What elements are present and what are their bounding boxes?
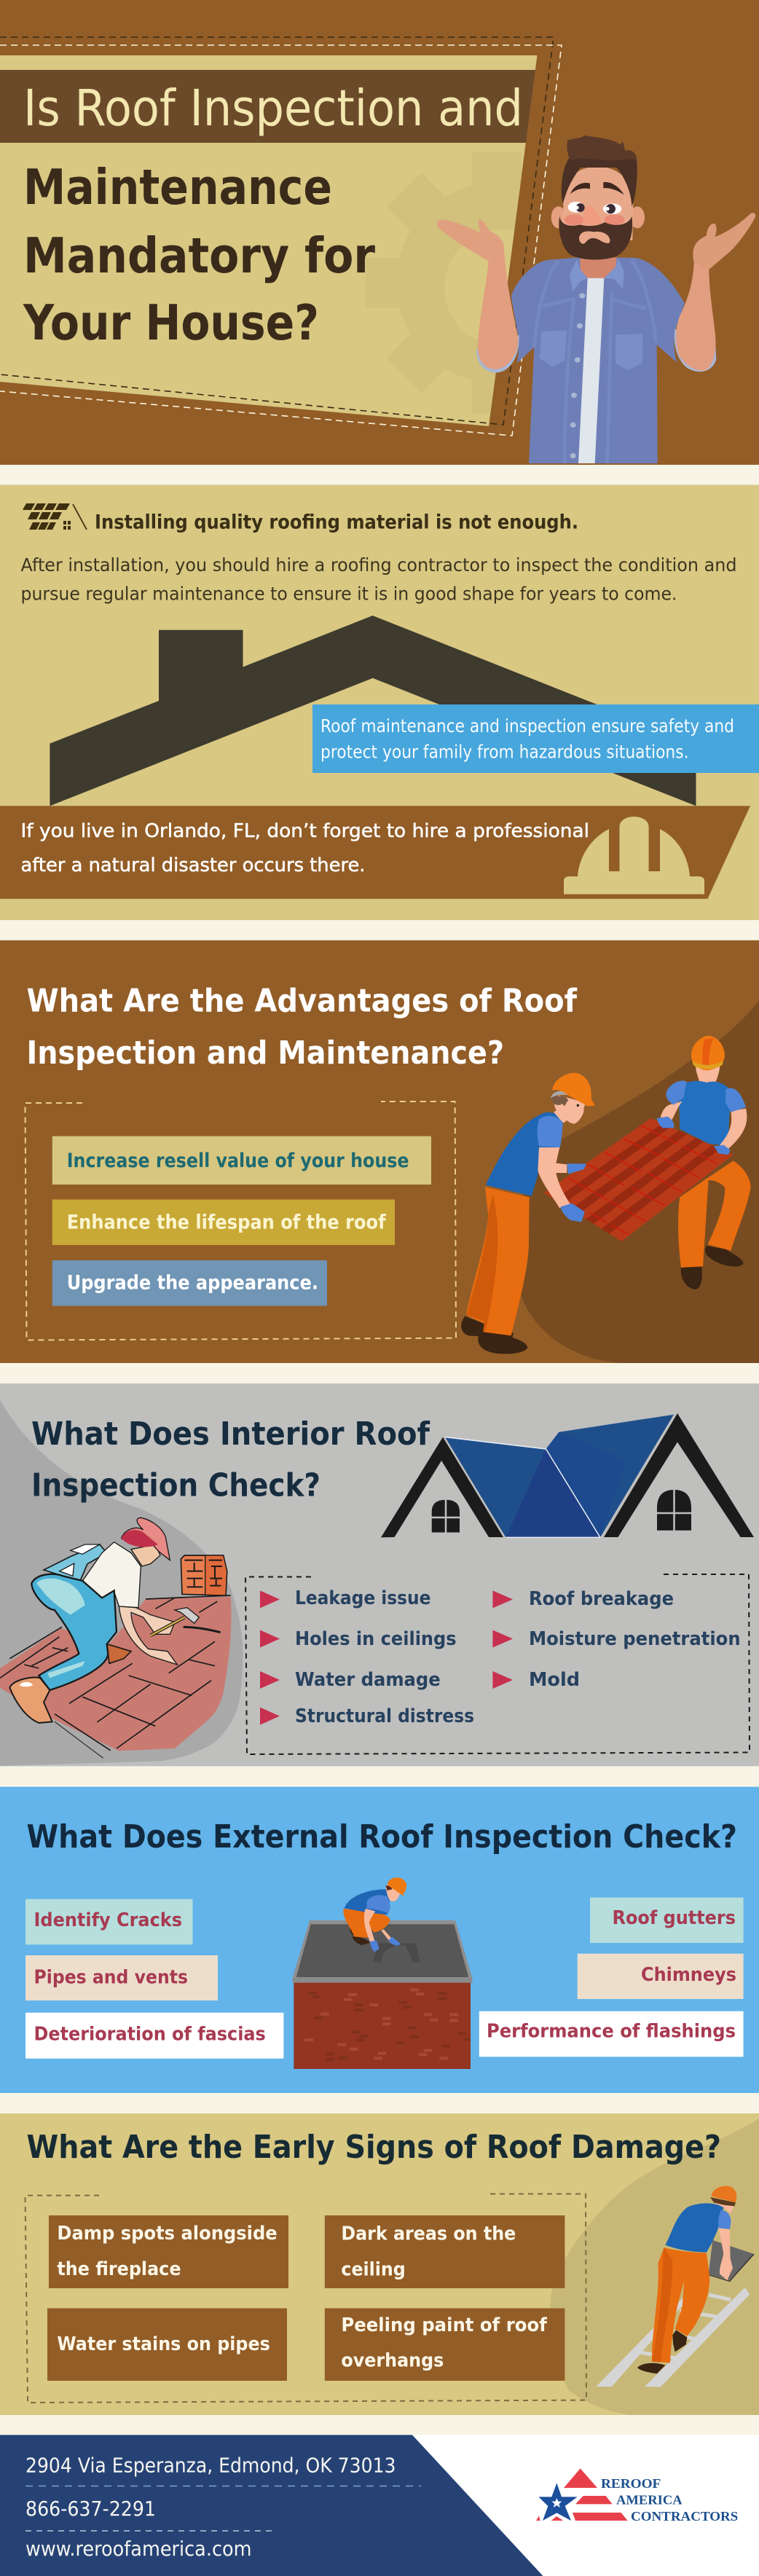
checklist: right column xyxy=(492,1588,741,1691)
bullet arrows left xyxy=(260,1590,280,1725)
checklist: right column: Moisture penetration xyxy=(529,1628,741,1650)
title: Maintenance xyxy=(23,159,332,216)
checklist: left column xyxy=(260,1587,474,1727)
sign: dark areas: Dark areas on the xyxy=(341,2223,516,2245)
bullet arrows right xyxy=(492,1590,513,1689)
intro paragraph: After installation, you should hire a roofing contractor to inspect the condition and xyxy=(20,554,737,576)
checklist: right column: Roof breakage xyxy=(529,1588,674,1610)
icon: hard hat xyxy=(564,817,704,895)
callout: safety xyxy=(312,704,759,773)
sign: water stains: Water stains on pipes xyxy=(57,2333,270,2355)
label: roof gutters xyxy=(590,1898,744,1943)
logo: REROOF xyxy=(601,2476,661,2491)
sign: peeling paint: Peeling paint of roof xyxy=(341,2314,547,2336)
heading: What Does Interior Roof xyxy=(31,1416,430,1453)
label: flashings xyxy=(479,2011,744,2057)
title xyxy=(23,79,523,351)
panel: installing quality roofing xyxy=(0,485,759,920)
contact phone: 866-637-2291 xyxy=(25,2497,156,2521)
list item: resell value xyxy=(52,1136,431,1185)
illustration: two workers carrying roof tiles xyxy=(461,1036,751,1354)
label: flashings: Performance of flashings xyxy=(487,2021,736,2043)
logo xyxy=(536,2468,739,2524)
icon: roof tiles xyxy=(23,503,87,530)
illustration: house roof silhouette xyxy=(50,616,696,806)
label: chimneys xyxy=(578,1954,744,1999)
backdrop hill xyxy=(550,2118,759,2415)
footer xyxy=(0,2435,759,2576)
callout: safety: protect your family from hazardous situations. xyxy=(320,742,689,763)
sign: damp spots: the fireplace xyxy=(57,2258,181,2280)
illustration: worker climbing ladder xyxy=(596,2186,754,2387)
sign: dark areas xyxy=(325,2215,565,2288)
title: Your House? xyxy=(23,294,319,351)
hero title card xyxy=(0,55,538,426)
backdrop shape xyxy=(0,1400,243,1766)
label: chimneys: Chimneys xyxy=(641,1964,736,1986)
label: fascias xyxy=(25,2013,283,2059)
label: pipes and vents xyxy=(25,1955,218,2000)
label: roof gutters: Roof gutters xyxy=(612,1907,736,1929)
intro paragraph xyxy=(20,554,737,605)
label: fascias: Deterioration of fascias xyxy=(34,2024,266,2046)
heading xyxy=(26,983,578,1072)
illustration: worker on flat roof building xyxy=(293,1877,472,2069)
logo: AMERICA xyxy=(616,2493,683,2508)
sign: damp spots: Damp spots alongside xyxy=(57,2223,278,2245)
panel: interior inspection xyxy=(0,1383,759,1766)
label: pipes and vents: Pipes and vents xyxy=(34,1967,188,1989)
sign: peeling paint xyxy=(325,2308,565,2381)
intro paragraph: pursue regular maintenance to ensure it is in good shape for years to come. xyxy=(20,583,677,605)
backdrop hill xyxy=(519,1000,759,1363)
contact website: www.reroofamerica.com xyxy=(25,2537,252,2561)
title: Is Roof Inspection and xyxy=(23,79,523,138)
banner: Orlando: after a natural disaster occurs there. xyxy=(20,855,366,876)
illustration: roofer hammering xyxy=(0,1517,232,1758)
list item: resell value: Increase resell value of your house xyxy=(67,1150,409,1172)
panel: external inspection xyxy=(0,1787,759,2093)
illustration: house with blue roof xyxy=(381,1413,754,1537)
label: identify cracks: Identify Cracks xyxy=(34,1909,182,1931)
panel: hero xyxy=(0,0,759,465)
heading: Inspection and Maintenance? xyxy=(26,1035,504,1072)
icon: gear watermark xyxy=(490,176,522,414)
illustration: shrugging man xyxy=(437,136,755,463)
label: identify cracks xyxy=(25,1899,192,1944)
banner: Orlando xyxy=(0,806,750,899)
contact address: 2904 Via Esperanza, Edmond, OK 73013 xyxy=(25,2454,396,2477)
heading: What Are the Advantages of Roof xyxy=(26,983,578,1020)
list item: lifespan xyxy=(52,1199,395,1245)
title: Mandatory for xyxy=(23,227,375,284)
checklist: left column: Water damage xyxy=(295,1669,441,1691)
sign: peeling paint: overhangs xyxy=(341,2350,444,2372)
panel: advantages xyxy=(0,941,759,1363)
heading: Inspection Check? xyxy=(31,1468,320,1504)
banner: Orlando: If you live in Orlando, FL, don’t forget to hire a professional xyxy=(20,820,589,842)
list item: lifespan: Enhance the lifespan of the roof xyxy=(67,1211,386,1234)
sign: damp spots xyxy=(49,2215,288,2288)
list item: appearance: Upgrade the appearance. xyxy=(67,1272,318,1294)
heading xyxy=(31,1416,430,1504)
checklist: right column: Mold xyxy=(529,1669,580,1691)
panel: early signs xyxy=(0,2113,759,2415)
logo: CONTRACTORS xyxy=(631,2509,739,2524)
checklist: left column: Holes in ceilings xyxy=(295,1628,457,1650)
sign: water stains xyxy=(47,2308,287,2381)
checklist: left column: Structural distress xyxy=(295,1705,474,1727)
sign: dark areas: ceiling xyxy=(341,2258,406,2280)
list item: appearance xyxy=(52,1260,327,1305)
heading: Installing quality roofing material is not enough. xyxy=(95,511,578,533)
checklist: left column: Leakage issue xyxy=(295,1587,430,1609)
